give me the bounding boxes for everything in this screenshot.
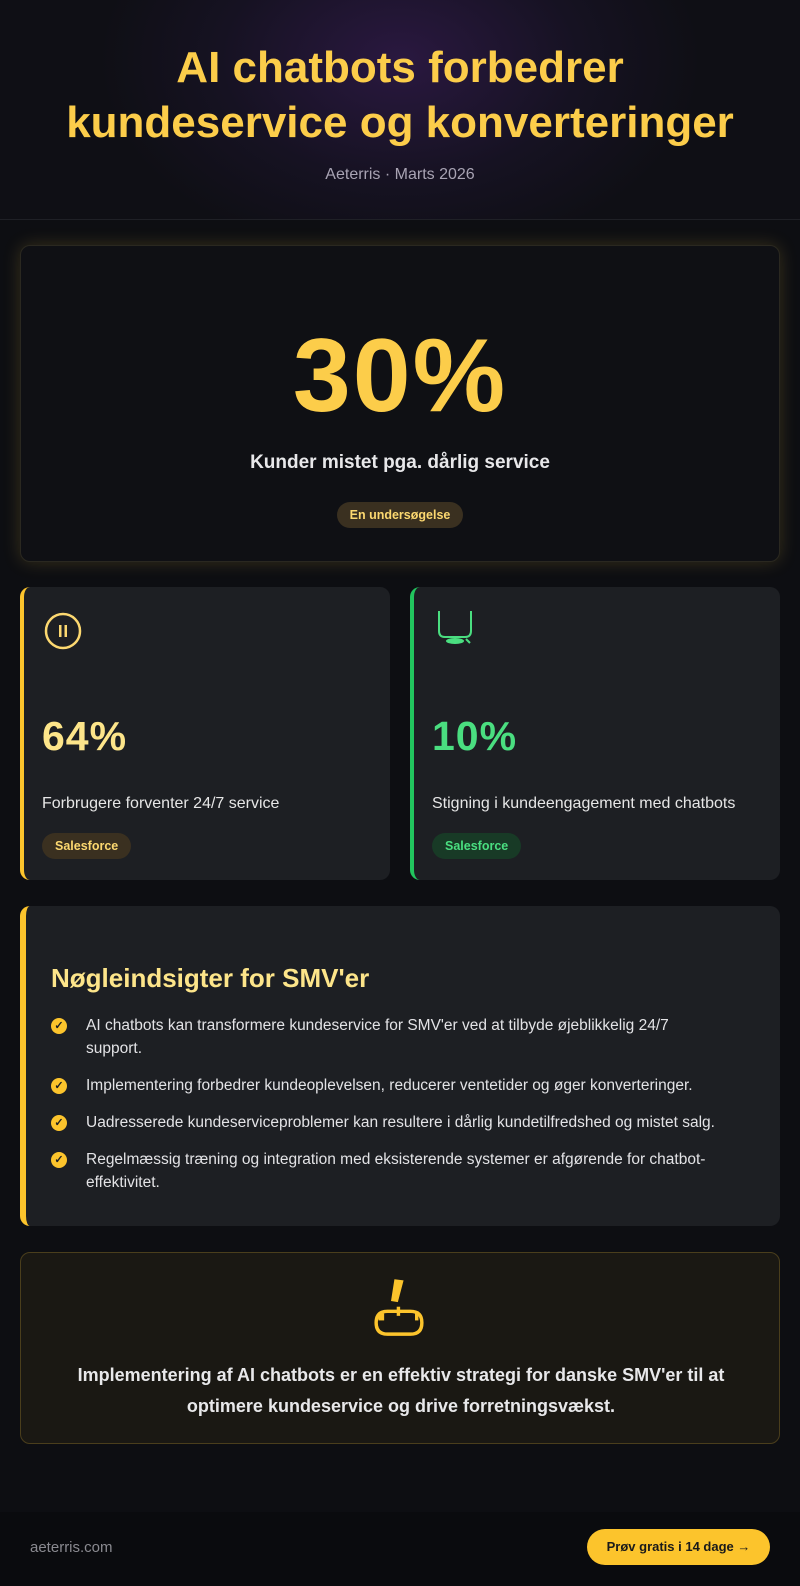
- item 1: ✓: [54, 1020, 64, 1032]
- icon: bell/hand: [374, 1279, 424, 1336]
- source pill: En undersøgelse: [350, 508, 450, 522]
- icon: screen: [438, 611, 472, 644]
- big number: 30%: [293, 318, 507, 434]
- CTA button: [587, 1529, 770, 1565]
- CTA button: Prøv gratis i 14 dage →: [607, 1539, 750, 1554]
- item 3: Uadresserede kundeserviceproblemer kan resultere i dårlig kundetilfredshed og mistet salg.: [86, 1114, 715, 1131]
- heading: Nøgleindsigter for SMV'er: [51, 963, 369, 993]
- item 4: ✓: [54, 1154, 64, 1166]
- footer site: aeterris.com: [30, 1539, 113, 1556]
- item 2: ✓: [54, 1080, 64, 1092]
- item 4: Regelmæssig træning og integration med eksisterende systemer er afgørende for chatbot-effektivitet.: [86, 1151, 705, 1191]
- item 2: Implementering forbedrer kundeoplevelsen, reducerer ventetider og øger konverteringer.: [86, 1077, 693, 1094]
- conclusion text: Implementering af AI chatbots er en effektiv strategi for danske SMV'er til at optimere kundeservice og drive forretningsvækst.: [78, 1365, 724, 1416]
- title: AI chatbots forbedrer: [176, 43, 624, 92]
- source pill: Salesforce: [55, 839, 118, 853]
- stat number: 64%: [42, 713, 127, 759]
- stat label: Stigning i kundeengagement med chatbots: [432, 795, 735, 812]
- panel: conclusion: [20, 1252, 780, 1444]
- hero stat card: [20, 245, 780, 562]
- footer: [0, 1512, 800, 1586]
- panel: key insights: [20, 906, 780, 1226]
- item 3: ✓: [54, 1117, 64, 1129]
- stat number: 10%: [432, 713, 517, 759]
- icon: pause circle: [44, 612, 82, 650]
- card: 64%: [20, 587, 390, 880]
- subtitle: Aeterris · Marts 2026: [325, 166, 475, 183]
- source pill: Salesforce: [445, 839, 508, 853]
- insight list: [51, 1017, 715, 1191]
- title: kundeservice og konverteringer: [66, 98, 734, 147]
- header: [0, 0, 800, 220]
- stat label: Forbrugere forventer 24/7 service: [42, 795, 279, 812]
- item 1: AI chatbots kan transformere kundeservice for SMV'er ved at tilbyde øjeblikkelig 24/7 support.: [86, 1017, 669, 1057]
- title: [66, 43, 734, 147]
- hero label: Kunder mistet pga. dårlig service: [250, 452, 550, 473]
- card: 10%: [410, 587, 780, 880]
